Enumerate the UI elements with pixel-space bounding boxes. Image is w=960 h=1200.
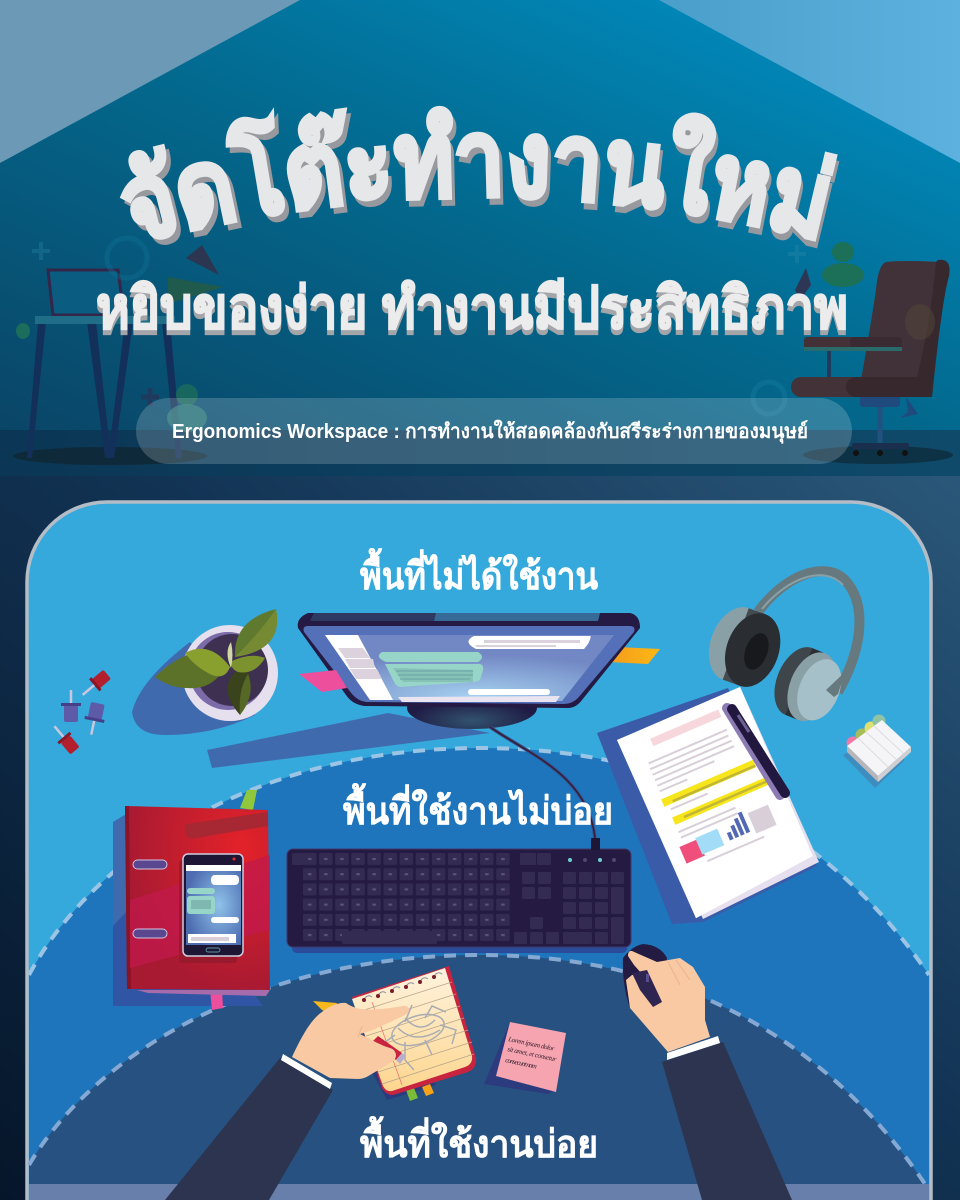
title: จัดโต๊ะทำงานใหม่ (124, 112, 840, 248)
faded background desk with laptop (13, 238, 207, 465)
monitor body (298, 613, 640, 708)
subtitle: หยิบของง่าย ทำงานมีประสิทธิภาพ (96, 281, 848, 346)
icon: paper with pen (597, 687, 819, 924)
info pill (136, 398, 852, 464)
notebook spider sketch (385, 1005, 456, 1070)
icon: potted plant (132, 609, 278, 735)
icon: pink note: sit amet, et consetur (507, 1045, 557, 1063)
background office chair (753, 242, 953, 464)
icon: pink note: Lorem ipsum dolor (507, 1035, 555, 1053)
icon: sticky index tabs (843, 714, 911, 788)
screen chat bubbles (468, 636, 591, 649)
zone: rarely used dashed border (29, 748, 929, 975)
icon: desktop monitor (298, 613, 660, 838)
yellow pencil tip (313, 1001, 337, 1014)
icon: left hand with suit sleeve (165, 1003, 409, 1200)
monitor cable (490, 727, 595, 838)
pink sticky tab (299, 670, 347, 692)
icon: keyboard (287, 838, 631, 953)
screen sidebar (325, 635, 393, 700)
orange sticky tab (608, 647, 660, 664)
panel: desk (27, 502, 931, 1200)
label: unused area: พื้นที่ไม่ได้ใช้งาน (360, 548, 598, 598)
subtitle: หยิบของง่าย ทำงานมีประสิทธิภาพ (96, 276, 848, 341)
label: frequently used area: พื้นที่ใช้งานบ่อย (360, 1116, 598, 1166)
zone: frequently used dashed border (29, 955, 929, 1190)
zone: frequently used area (29, 955, 929, 1200)
icon: notebook (313, 966, 476, 1101)
icon: binder with smartphone (113, 790, 270, 1010)
icon: pink note (484, 1022, 566, 1094)
icon: pink note: consecunt nam (505, 1056, 538, 1071)
monitor stand (407, 687, 537, 729)
pencil in hand (371, 1036, 402, 1060)
info pill: Ergonomics Workspace : การทำงานให้สอดคล้องกับสรีระร่างกายของมนุษย์ (172, 419, 808, 444)
icon: monitor shadow (207, 713, 490, 768)
icon: headphones (699, 571, 859, 731)
title: จัดโต๊ะทำงานใหม่ (120, 106, 838, 242)
label: rarely used area: พื้นที่ใช้งานไม่บ่อย (343, 783, 613, 833)
icon: mouse and right hand (623, 944, 792, 1200)
icon: push pins (48, 668, 112, 756)
bottom band (29, 1184, 929, 1200)
decorative triangles (168, 245, 811, 304)
monitor screen (304, 626, 634, 704)
zone: rarely used area (29, 748, 929, 1200)
